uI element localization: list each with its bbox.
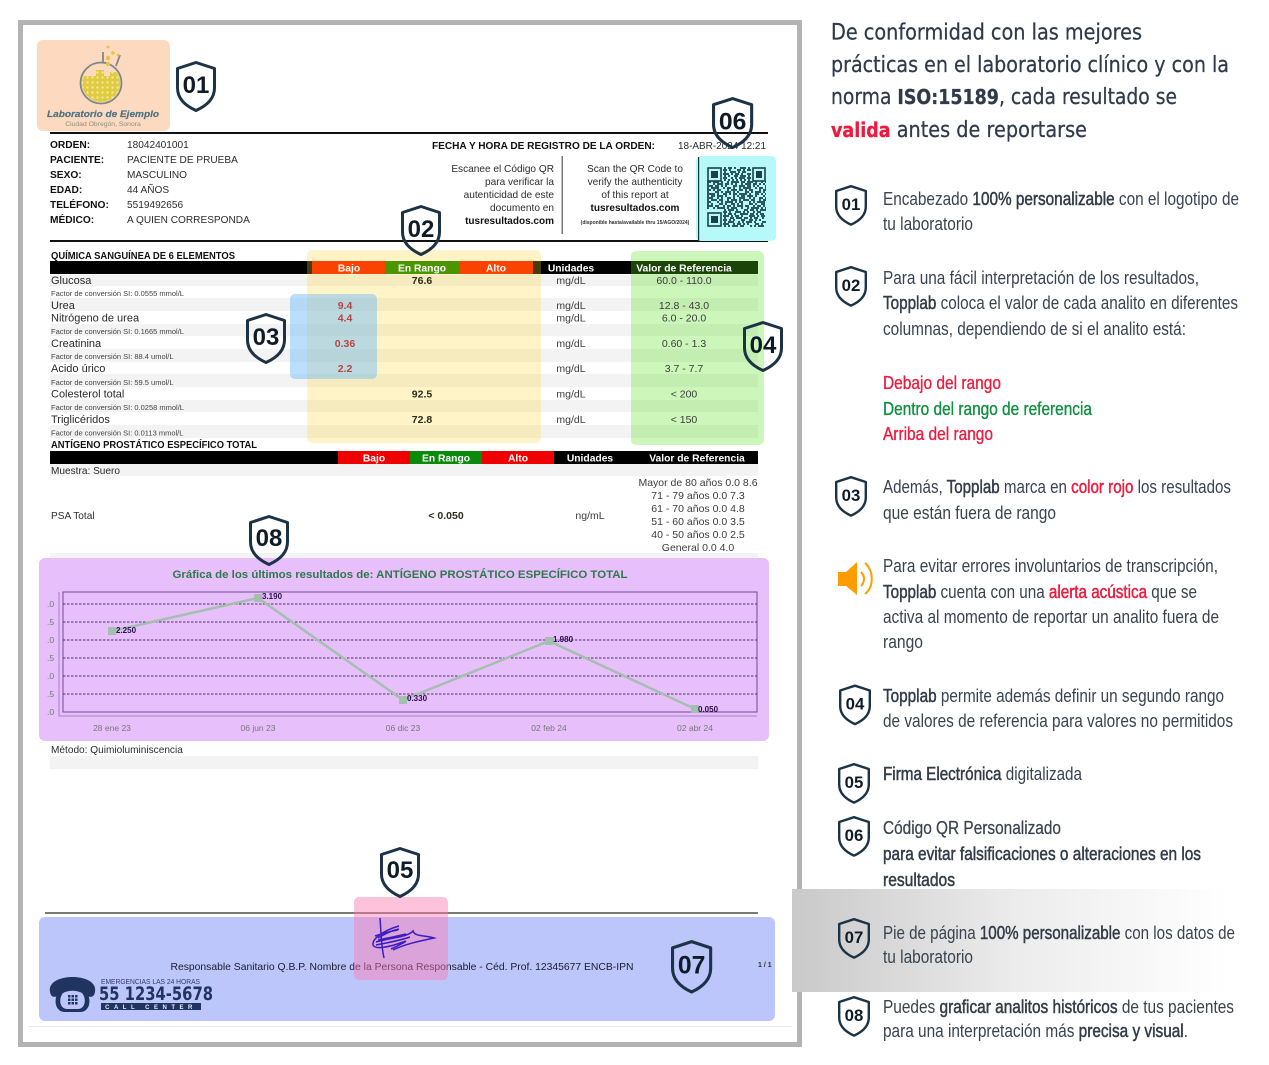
item 05: 05 xyxy=(845,773,863,792)
patient data: MÉDICO: xyxy=(50,213,94,226)
item 01: 01 xyxy=(842,195,860,214)
QR instructions: tusresultados.com xyxy=(591,203,680,214)
highlight: result columns xyxy=(307,250,541,443)
heading: norma ISO:15189, cada resultado se xyxy=(831,85,1177,110)
shield 01 on report: 01 xyxy=(183,72,209,99)
panel: historical chart: .5 xyxy=(47,617,54,627)
table: química sanguínea: mg/dL xyxy=(556,300,586,312)
table: química sanguínea: Acido úrico xyxy=(51,363,105,375)
table: química sanguínea: Unidades xyxy=(548,264,594,274)
panel: historical chart: .5 xyxy=(47,653,54,663)
table: química sanguínea: 9.4 xyxy=(338,300,352,312)
panel: historical chart: 3.190 xyxy=(262,592,283,601)
table: química sanguínea: mg/dL xyxy=(556,338,586,350)
header rule bottom xyxy=(50,240,768,242)
table: química sanguínea: 3.7 - 7.7 xyxy=(665,363,703,375)
table: antígeno prostático: 71 - 79 años 0.0 7.3 xyxy=(651,490,745,502)
icon: call center phone xyxy=(50,977,213,1012)
logo: Laboratorio de Ejemplo xyxy=(37,40,170,131)
patient data: 44 AÑOS xyxy=(127,183,169,196)
table: antígeno prostático: Unidades xyxy=(567,454,613,464)
patient data: PACIENTE DE PRUEBA xyxy=(127,155,238,166)
table: antígeno prostático: Alto xyxy=(508,454,528,464)
QR instructions: tusresultados.com xyxy=(465,216,554,227)
highlight: reference values xyxy=(631,251,764,445)
method: Método: Quimioluminiscencia xyxy=(51,745,183,756)
panel: historical chart: 06 dic 23 xyxy=(386,723,421,733)
table: química sanguínea: mg/dL xyxy=(556,363,586,375)
table: química sanguínea: mg/dL xyxy=(556,414,586,426)
item 03: 03 xyxy=(842,486,860,505)
QR instructions: (disponible hasta/available thru 15/AGO/2024) xyxy=(581,220,690,226)
table: química sanguínea: mg/dL xyxy=(556,275,586,287)
table: química sanguínea: Glucosa xyxy=(51,275,92,287)
patient data: 18042401001 xyxy=(127,140,189,151)
item: alerta acústica: rango xyxy=(883,631,923,652)
item 06: resultados xyxy=(883,869,955,890)
icon: call center phone: 55 1234-5678 xyxy=(99,983,213,1005)
footer base line xyxy=(28,1026,792,1027)
shield 01 on report xyxy=(178,62,214,110)
item 05 xyxy=(839,763,1083,803)
QR instructions xyxy=(451,156,690,234)
item 02: 02 xyxy=(842,276,860,295)
heading: De conformidad con las mejores xyxy=(831,20,1142,46)
shield 06 on report xyxy=(714,99,752,147)
item 08: Puedes graficar analitos históricos de tus pacientes xyxy=(883,996,1234,1017)
table: química sanguínea: Factor de conversión SI: 59.5 umol/L xyxy=(51,378,174,387)
shield 07 on report xyxy=(673,942,711,992)
item 02: Dentro del rango de referencia xyxy=(883,398,1093,419)
item 07: 07 xyxy=(845,928,863,947)
order date: 18-ABR-2024 12:21 xyxy=(678,141,766,152)
patient data: EDAD: xyxy=(50,185,82,196)
table: antígeno prostático: ANTÍGENO PROSTÁTICO ESPECÍFICO TOTAL xyxy=(51,438,258,451)
QR instructions: of this report at xyxy=(601,190,669,201)
patient data: A QUIEN CORRESPONDA xyxy=(127,215,250,226)
panel: historical chart: 0.330 xyxy=(407,694,428,703)
QR code xyxy=(696,156,776,241)
item 06: 06 xyxy=(845,826,863,845)
table: química sanguínea: Factor de conversión SI: 0.0555 mmol/L xyxy=(51,289,184,298)
shield 03 on report: 03 xyxy=(253,324,279,351)
table: química sanguínea: Creatinina xyxy=(51,338,102,350)
panel: historical chart: 0.050 xyxy=(698,705,719,714)
item 04 xyxy=(840,685,1233,731)
table: química sanguínea: QUÍMICA SANGUÍNEA DE 6 ELEMENTOS xyxy=(51,249,235,262)
panel: footer xyxy=(39,917,775,1021)
panel: historical chart: 06 jun 23 xyxy=(241,723,276,733)
heading: valida antes de reportarse xyxy=(831,118,1087,143)
shield 04 on report xyxy=(744,322,782,370)
table: química sanguínea: Factor de conversión SI: 0.0258 mmol/L xyxy=(51,403,184,412)
table: química sanguínea: Alto xyxy=(486,264,506,274)
header rule top xyxy=(50,132,768,134)
table: química sanguínea: 92.5 xyxy=(412,388,432,400)
item 06: Código QR Personalizado xyxy=(883,817,1061,838)
table: química sanguínea: Colesterol total xyxy=(51,388,124,400)
table: química sanguínea: 6.0 - 20.0 xyxy=(662,312,706,324)
patient data: TELÉFONO: xyxy=(50,198,109,211)
panel: historical chart: 28 ene 23 xyxy=(93,723,131,733)
item 02: columnas, dependiendo de si el analito está: xyxy=(883,318,1186,339)
order date xyxy=(432,141,766,152)
table: antígeno prostático: < 0.050 xyxy=(428,510,464,522)
icon: speaker xyxy=(838,562,872,595)
QR instructions: verify the authenticity xyxy=(588,177,683,188)
item 02: Para una fácil interpretación de los resultados, xyxy=(883,267,1199,288)
method xyxy=(50,745,758,769)
table: química sanguínea: Factor de conversión SI: 0.0113 mmol/L xyxy=(51,428,183,438)
table: química sanguínea: 76.6 xyxy=(412,275,432,287)
logo: Laboratorio de Ejemplo: Laboratorio de Ejemplo xyxy=(47,109,159,120)
item 07: Pie de página 100% personalizable con los datos de xyxy=(883,922,1235,943)
order date: FECHA Y HORA DE REGISTRO DE LA ORDEN: xyxy=(432,141,655,152)
panel: historical chart: .0 xyxy=(47,707,54,717)
item 02 xyxy=(836,267,1238,444)
item 01: Encabezado 100% personalizable con el logotipo de xyxy=(883,188,1239,209)
table: química sanguínea: 4.4 xyxy=(338,312,352,324)
table: química sanguínea: 72.8 xyxy=(412,414,432,426)
signature highlight xyxy=(354,897,448,980)
icon: call center phone: CALL CENTER xyxy=(105,1005,197,1011)
shield 05 on report: 05 xyxy=(387,857,413,884)
panel: historical chart: .0 xyxy=(47,671,54,681)
table: química sanguínea: Bajo xyxy=(338,264,360,274)
panel: historical chart: 02 feb 24 xyxy=(531,723,567,733)
item 07: tu laboratorio xyxy=(883,946,973,967)
table: antígeno prostático: 61 - 70 años 0.0 4.8 xyxy=(651,503,745,515)
table: química sanguínea: Triglicéridos xyxy=(51,414,110,426)
table: antígeno prostático: ng/mL xyxy=(575,510,605,522)
item: alerta acústica: Topplab cuenta con una alerta acústica que se xyxy=(883,581,1197,602)
patient data: PACIENTE: xyxy=(50,155,104,166)
table: antígeno prostático xyxy=(50,438,758,566)
item 06 xyxy=(839,817,1201,890)
panel: historical chart: 1.980 xyxy=(553,635,574,644)
table: química sanguínea: 12.8 - 43.0 xyxy=(659,300,709,312)
panel: historical chart: Gráfica de los últimos resultados de: ANTÍGENO PROSTÁTICO ESPECÍFICO TOTAL xyxy=(172,568,628,581)
table: antígeno prostático: Muestra: Suero xyxy=(51,466,120,477)
table: química sanguínea: 0.60 - 1.3 xyxy=(662,338,706,350)
gradient band behind item 07 xyxy=(792,889,1242,992)
patient data: ORDEN: xyxy=(50,140,90,151)
panel: historical chart: .0 xyxy=(47,635,54,645)
table: química sanguínea: 60.0 - 110.0 xyxy=(656,275,712,287)
table: química sanguínea: 0.36 xyxy=(335,338,355,350)
shield 08 on report: 08 xyxy=(256,525,282,552)
item 06: para evitar falsificaciones o alteraciones en los xyxy=(883,843,1201,864)
panel: historical chart: 2.250 xyxy=(116,626,137,635)
icon: call center phone: EMERGENCIAS LAS 24 HORAS xyxy=(101,977,200,986)
patient data: MASCULINO xyxy=(127,170,187,181)
table: antígeno prostático: En Rango xyxy=(422,454,470,464)
table: química sanguínea: Factor de conversión SI: 88.4 umol/L xyxy=(51,352,174,361)
table: química sanguínea: mg/dL xyxy=(556,388,586,400)
footer rule xyxy=(45,912,758,914)
QR instructions: Scan the QR Code to xyxy=(587,164,683,175)
panel: historical chart xyxy=(39,558,769,741)
table: antígeno prostático: Mayor de 80 años 0.0 8.6 xyxy=(638,477,758,489)
table: antígeno prostático: 51 - 60 años 0.0 3.5 xyxy=(651,516,745,528)
panel: historical chart: .0 xyxy=(47,599,54,609)
table: química sanguínea: < 150 xyxy=(671,414,697,426)
panel: footer: Responsable Sanitario Q.B.P. Nombre de la Persona Responsable - Céd. Prof. 12345677 ENCB-IPN xyxy=(170,961,634,973)
highlight: out of range values xyxy=(290,294,377,379)
heading xyxy=(831,20,1229,143)
patient data xyxy=(50,140,250,226)
item 07 xyxy=(839,919,1235,967)
item 02: Arriba del rango xyxy=(883,423,993,444)
item 08: 08 xyxy=(845,1006,863,1025)
table: química sanguínea: En Rango xyxy=(398,264,446,274)
signature xyxy=(373,918,434,958)
table: química sanguínea: Urea xyxy=(51,300,76,312)
panel: historical chart: .5 xyxy=(47,689,54,699)
item 01: tu laboratorio xyxy=(883,213,973,234)
item 08 xyxy=(839,996,1234,1041)
item 05: Firma Electrónica digitalizada xyxy=(883,763,1083,784)
item 04: 04 xyxy=(846,694,865,713)
shield 02 on report: 02 xyxy=(408,216,434,243)
item 08: para una interpretación más precisa y visual. xyxy=(883,1020,1188,1041)
table: química sanguínea: mg/dL xyxy=(556,312,586,324)
table: química sanguínea: Valor de Referencia xyxy=(636,264,732,274)
panel: footer: 1 / 1 xyxy=(758,962,772,969)
panel: historical chart: 02 abr 24 xyxy=(677,723,713,733)
shield 03 on report xyxy=(248,314,284,362)
patient data: 5519492656 xyxy=(127,200,184,211)
item 03: que están fuera de rango xyxy=(883,502,1056,523)
item 01 xyxy=(836,186,1239,234)
table: antígeno prostático: Valor de Referencia xyxy=(649,454,745,464)
shield 02 on report xyxy=(402,206,440,254)
item: alerta acústica xyxy=(838,555,1219,652)
table: química sanguínea: Nitrógeno de urea xyxy=(51,312,140,324)
shield 04 on report: 04 xyxy=(750,332,777,359)
table: química sanguínea: Factor de conversión SI: 0.1665 mmol/L xyxy=(51,327,184,336)
table rows background xyxy=(50,261,758,438)
item 02: Debajo del rango xyxy=(883,372,1001,393)
item 03 xyxy=(836,476,1231,523)
table: antígeno prostático: General 0.0 4.0 xyxy=(662,542,734,554)
table: antígeno prostático: Bajo xyxy=(363,454,385,464)
QR instructions: para verificar la xyxy=(485,177,554,188)
shield 06 on report: 06 xyxy=(719,109,746,136)
QR instructions: documento en xyxy=(490,203,554,214)
QR instructions: Escanee el Código QR xyxy=(451,164,554,175)
shield 07 on report: 07 xyxy=(678,951,705,980)
logo: Laboratorio de Ejemplo: Ciudad Obregón, Sonora xyxy=(65,121,141,128)
patient data: SEXO: xyxy=(50,170,82,181)
shield 08 on report xyxy=(250,516,288,564)
table: química sanguínea: < 200 xyxy=(671,388,697,400)
QR instructions: autenticidad de este xyxy=(464,190,554,201)
table: antígeno prostático: PSA Total xyxy=(51,511,95,522)
report page frame xyxy=(20,22,800,1044)
table: química sanguínea xyxy=(51,249,732,438)
shield 05 on report xyxy=(382,848,418,896)
table: química sanguínea: 2.2 xyxy=(338,363,352,375)
item 03: Además, Topplab marca en color rojo los resultados xyxy=(883,476,1231,497)
table: antígeno prostático: 40 - 50 años 0.0 2.5 xyxy=(651,529,745,541)
